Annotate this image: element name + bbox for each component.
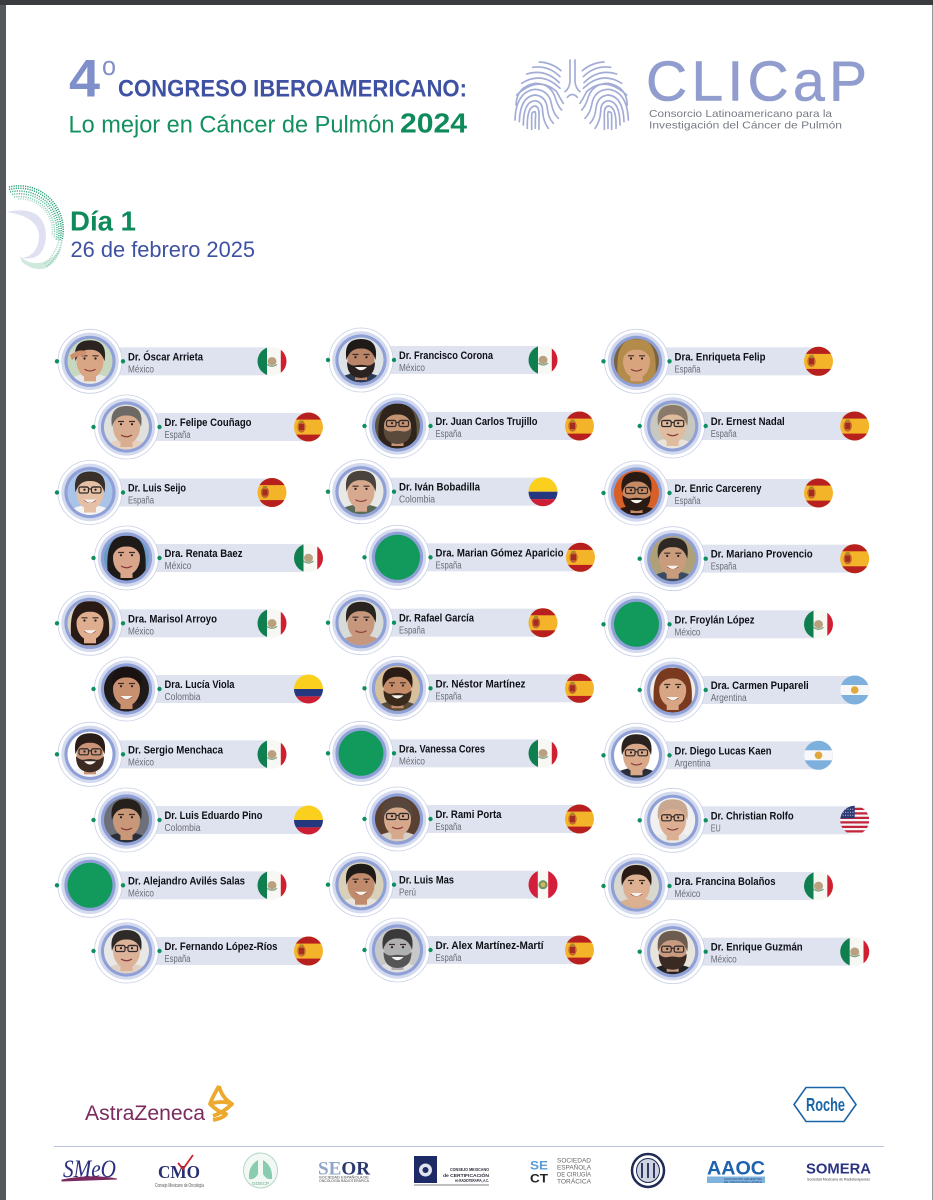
speaker: Dr. Luis Eduardo Pino bbox=[91, 788, 324, 852]
speaker: Dr. Rafael García: España bbox=[399, 626, 425, 637]
date: 26 de febrero 2025 bbox=[70, 237, 255, 262]
logo: CMO: Consejo Mexicano de Oncología bbox=[155, 1183, 204, 1189]
logo: Consejo Mexicano de Radioterapia bbox=[414, 1156, 489, 1185]
speaker: Dr. Iván Bobadilla bbox=[326, 460, 558, 524]
logo: CLICaP: CLICaP bbox=[646, 50, 867, 114]
logo: SECT: CT bbox=[530, 1172, 549, 1186]
speaker: Dra. Vanessa Cores: México bbox=[399, 756, 425, 767]
speaker: Dr. Alejandro Avilés Salas: México bbox=[128, 888, 154, 899]
speaker: Dr. Alejandro Avilés Salas: Dr. Alejandro Avilés Salas bbox=[128, 875, 245, 887]
heading: Día 1: Día 1 bbox=[70, 206, 136, 237]
speaker: Dr. Froylán López: México bbox=[674, 627, 701, 638]
speaker: Dr. Fernando López-Ríos: España bbox=[164, 954, 191, 965]
speaker: Dr. Óscar Arrieta bbox=[55, 329, 287, 393]
logo: SEOR: ONCOLOGÍA RADIOTERÁPICA bbox=[319, 1179, 370, 1183]
speaker: Dra. Renata Baez: México bbox=[164, 561, 192, 572]
speaker: Dra. Carmen Pupareli: Argentina bbox=[711, 693, 747, 704]
speaker: Dr. Diego Lucas Kaen: Argentina bbox=[674, 758, 711, 769]
speaker: Dr. Fernando López-Ríos: Dr. Fernando López-Ríos bbox=[164, 941, 278, 953]
logo: Roche: Roche bbox=[806, 1095, 845, 1115]
logo: SEOR: SOCIEDAD ESPAÑOLA DE bbox=[319, 1174, 370, 1180]
speaker: Dr. Felipe Couñago: España bbox=[164, 430, 191, 441]
speaker: Dr. Rami Porta: España bbox=[436, 822, 462, 833]
speaker: Dr. Juan Carlos Trujillo: España bbox=[436, 429, 462, 440]
logo: CMO bbox=[155, 1155, 204, 1189]
speaker: Dr. Luis Mas: Dr. Luis Mas bbox=[399, 875, 454, 887]
speaker: Dr. Froylán López: Dr. Froylán López bbox=[674, 614, 755, 626]
speaker: Dr. Ernest Nadal: Dr. Ernest Nadal bbox=[711, 416, 785, 428]
speaker: Dr. Alex Martínez-Martí bbox=[362, 918, 594, 982]
logo: CLICaP bbox=[515, 50, 867, 132]
speaker: Dr. Néstor Martínez bbox=[362, 656, 594, 720]
speaker: Dra. Renata Baez: Dra. Renata Baez bbox=[164, 548, 243, 560]
speaker: Dra. Francina Bolaños bbox=[601, 854, 834, 918]
speaker: Dra. Marian Gómez Aparicio: Dra. Marian Gómez Aparicio bbox=[436, 547, 564, 559]
logo: SECT: SOCIEDAD bbox=[557, 1158, 592, 1164]
logo: circular seal bbox=[632, 1154, 664, 1187]
logo: SECT bbox=[530, 1158, 592, 1186]
logo: GOECP: GOECP bbox=[252, 1181, 269, 1186]
speaker: Dr. Francisco Corona bbox=[326, 328, 558, 392]
logo: Consejo Mexicano de Radioterapia: CONSEJO MEXICANO bbox=[450, 1167, 489, 1173]
speaker: Dra. Lucía Viola: Dra. Lucía Viola bbox=[164, 679, 235, 691]
speaker: Dr. Fernando López-Ríos bbox=[91, 919, 324, 983]
title: 4° Congreso Iberoamericano: 4 bbox=[69, 50, 101, 108]
speaker: Dr. Enrique Guzmán bbox=[638, 920, 870, 984]
speaker: Dr. Sergio Menchaca: Dr. Sergio Menchaca bbox=[128, 744, 224, 756]
speaker: Dr. Iván Bobadilla: Colombia bbox=[399, 495, 435, 506]
speaker: Dr. Alex Martínez-Martí: Dr. Alex Martínez-Martí bbox=[436, 940, 544, 952]
logo: AAOC: ASOCIACIÓN ARGENTINA bbox=[724, 1176, 762, 1181]
speaker: Dr. Francisco Corona: Dr. Francisco Corona bbox=[399, 350, 494, 362]
logo: Consejo Mexicano de Radioterapia: de CERTIFICACIÓN bbox=[443, 1173, 489, 1178]
speaker: Dr. Luis Mas bbox=[326, 853, 558, 917]
title: 4° Congreso Iberoamericano: o bbox=[102, 51, 116, 81]
speaker: Dr. Mariano Provencio: Dr. Mariano Provencio bbox=[711, 549, 813, 561]
speaker: Dr. Enric Carcereny: España bbox=[674, 496, 701, 507]
logo: CMO: CMO bbox=[158, 1162, 200, 1182]
speaker: Dr. Sergio Menchaca bbox=[55, 722, 287, 786]
speaker: Dra. Enriqueta Felip: España bbox=[674, 364, 701, 375]
title: 4° Congreso Iberoamericano: CONGRESO IBEROAMERICANO: bbox=[118, 76, 467, 102]
logo: SECT: DE CIRUGÍA bbox=[557, 1172, 591, 1178]
speaker: Dra. Vanessa Cores: Dra. Vanessa Cores bbox=[399, 743, 485, 755]
speaker: Dr. Ernest Nadal: España bbox=[711, 429, 737, 440]
speaker: Dra. Carmen Pupareli bbox=[638, 658, 870, 722]
speaker: Dra. Marisol Arroyo: México bbox=[128, 626, 154, 637]
logo: AAOC: AAOC bbox=[707, 1158, 765, 1180]
title: 4° Congreso Iberoamericano bbox=[68, 50, 467, 139]
speaker: Dr. Mariano Provencio bbox=[638, 527, 870, 591]
logo: SMeO: SMeO bbox=[63, 1156, 116, 1183]
speaker: Dr. Luis Mas: Perú bbox=[399, 888, 416, 899]
logo: AAOC: DE ONCOLOGÍA CLÍNICA bbox=[724, 1180, 762, 1184]
speaker: Dra. Marian Gómez Aparicio: España bbox=[436, 560, 462, 571]
speaker: Dr. Rafael García: Dr. Rafael García bbox=[399, 613, 475, 625]
speaker: Dr. Diego Lucas Kaen: Dr. Diego Lucas Kaen bbox=[674, 745, 772, 757]
title: 4° Congreso Iberoamericano: Lo mejor en Cáncer de Pulmón bbox=[68, 112, 394, 139]
speaker: Dr. Luis Seijo bbox=[55, 460, 287, 524]
speaker: Dr. Alejandro Avilés Salas bbox=[55, 853, 287, 917]
logo: SECT: TORÁCICA bbox=[557, 1178, 591, 1186]
speaker: Dr. Luis Seijo: España bbox=[128, 496, 154, 506]
speaker: Dr. Juan Carlos Trujillo bbox=[362, 394, 594, 458]
speaker: Dra. Enriqueta Felip: Dra. Enriqueta Felip bbox=[674, 351, 766, 363]
speaker: Dra. Renata Baez bbox=[91, 526, 324, 590]
speaker: Dra. Lucía Viola bbox=[91, 657, 324, 721]
speaker: Dr. Ernest Nadal bbox=[638, 394, 870, 458]
logo: AstraZeneca bbox=[85, 1086, 232, 1125]
speaker: Dra. Vanessa Cores bbox=[326, 721, 558, 785]
speaker: Dr. Francisco Corona: México bbox=[399, 363, 425, 374]
speaker: Dra. Marisol Arroyo: Dra. Marisol Arroyo bbox=[128, 613, 217, 625]
speaker: Dra. Marisol Arroyo bbox=[55, 591, 287, 655]
speaker: Dr. Christian Rolfo bbox=[638, 788, 870, 852]
speaker: Dra. Enriqueta Felip bbox=[601, 329, 834, 393]
speaker: Dra. Marian Gómez Aparicio bbox=[362, 525, 596, 589]
logo: GOECP bbox=[244, 1153, 278, 1188]
logo: Roche bbox=[794, 1088, 856, 1122]
speaker: Dr. Luis Eduardo Pino: Dr. Luis Eduardo Pino bbox=[164, 810, 263, 822]
speaker: Dr. Enric Carcereny: Dr. Enric Carcereny bbox=[674, 483, 762, 495]
speaker: Dr. Óscar Arrieta: México bbox=[128, 364, 154, 375]
speaker: Dr. Diego Lucas Kaen bbox=[601, 723, 834, 787]
logo: SECT: SE bbox=[530, 1158, 548, 1172]
speaker: Dra. Francina Bolaños: Dra. Francina Bolaños bbox=[674, 876, 776, 888]
speaker: Dra. Francina Bolaños: México bbox=[674, 889, 701, 900]
speaker: Dr. Christian Rolfo: Dr. Christian Rolfo bbox=[711, 810, 794, 822]
logo: CLICaP: Investigación del Cáncer de Pulmón bbox=[649, 120, 842, 132]
speaker: Dr. Rafael García bbox=[326, 591, 558, 655]
speaker: Dr. Mariano Provencio: España bbox=[711, 562, 737, 573]
speaker: Dr. Alex Martínez-Martí: España bbox=[436, 953, 462, 964]
speaker: Dr. Christian Rolfo: EU bbox=[711, 823, 721, 834]
speaker: Dr. Rami Porta bbox=[362, 787, 594, 851]
speaker: Dr. Froylán López bbox=[601, 592, 834, 656]
logo: CLICaP: Consorcio Latinoamericano para la bbox=[649, 108, 832, 120]
speaker: Dr. Enrique Guzmán: México bbox=[711, 955, 737, 966]
logo: Consejo Mexicano de Radioterapia: en RADIOTERAPIA, A.C. bbox=[455, 1178, 489, 1183]
logo: AstraZeneca: AstraZeneca bbox=[85, 1102, 205, 1125]
speaker: Dr. Enrique Guzmán: Dr. Enrique Guzmán bbox=[711, 942, 803, 954]
logo: SOMERA: SOMERA bbox=[806, 1160, 871, 1178]
speaker: Dr. Rami Porta: Dr. Rami Porta bbox=[436, 809, 502, 821]
speaker: Dr. Néstor Martínez: España bbox=[436, 691, 462, 702]
speaker: Dr. Sergio Menchaca: México bbox=[128, 757, 154, 768]
speaker: Dr. Luis Seijo: Dr. Luis Seijo bbox=[128, 482, 186, 494]
title: 4° Congreso Iberoamericano: 2024 bbox=[400, 108, 467, 139]
speaker: Dr. Néstor Martínez: Dr. Néstor Martínez bbox=[436, 678, 526, 690]
speaker: Dr. Luis Eduardo Pino: Colombia bbox=[164, 823, 201, 834]
speaker: Dr. Iván Bobadilla: Dr. Iván Bobadilla bbox=[399, 482, 481, 494]
speaker: Dr. Felipe Couñago: Dr. Felipe Couñago bbox=[164, 417, 252, 429]
speaker: Dr. Juan Carlos Trujillo: Dr. Juan Carlos Trujillo bbox=[436, 416, 538, 428]
speaker: Dr. Felipe Couñago bbox=[91, 395, 324, 459]
decorative swirl bbox=[6, 186, 63, 269]
logo: SEOR: SEOR bbox=[318, 1160, 371, 1180]
logo: SOMERA: Sociedad Mexicana de Radioterapeutas bbox=[807, 1176, 870, 1182]
speaker: Dr. Óscar Arrieta: Dr. Óscar Arrieta bbox=[128, 350, 204, 363]
icon: fingerprint lungs bbox=[515, 60, 628, 129]
logo: SECT: ESPAÑOLA bbox=[557, 1164, 591, 1172]
speaker: Dra. Carmen Pupareli: Dra. Carmen Pupareli bbox=[711, 680, 809, 692]
speaker: Dra. Lucía Viola: Colombia bbox=[164, 692, 201, 703]
speaker: Dr. Enric Carcereny bbox=[601, 461, 834, 525]
